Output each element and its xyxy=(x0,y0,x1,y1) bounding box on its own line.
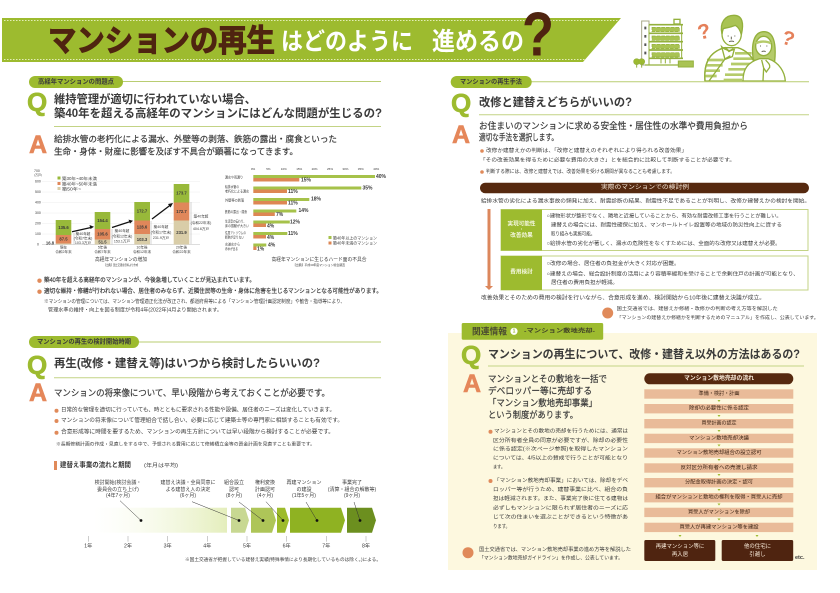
bullet notes: については、4/5以上の賛成で行うことが可能となり xyxy=(493,453,628,461)
question text xyxy=(54,92,382,120)
bullet notes: ります。 xyxy=(493,523,510,530)
answer text: デベロッパー等に売却する xyxy=(488,385,592,396)
title: white subheading: はどのように xyxy=(281,28,413,56)
bullet notes: 担は軽減されます。また、事業完了後に住てる建物は xyxy=(493,494,629,502)
bracket labels: 築40年超 xyxy=(76,231,91,236)
flow header: マンション敷地売却の流れ xyxy=(684,374,754,382)
bracket labels: (令和7年末) xyxy=(74,236,92,240)
category labels: 水道水から xyxy=(225,242,240,246)
arrow: down xyxy=(485,209,493,290)
stage labels: の建設 xyxy=(296,486,312,493)
green and orange bars xyxy=(253,175,375,250)
question text: 再生(改修・建替え等)はいつから検討したらいいの? xyxy=(54,356,320,370)
stage labels: 組合設立 xyxy=(224,479,244,486)
axis labels: 令和2年末 xyxy=(55,249,72,254)
box: feasibility xyxy=(501,210,808,250)
category labels: 鉄筋の露出・腐食 xyxy=(225,209,247,214)
flow header xyxy=(644,373,793,384)
timeline heading: 建替え事業の流れと期間 xyxy=(60,460,131,469)
flow arrows xyxy=(678,400,758,537)
flow steps: 買受人がマンションを除却 xyxy=(688,507,750,515)
axis labels: 令和22年末 xyxy=(172,249,191,254)
question text: 築40年を超える高経年のマンションにはどんな問題が生じるの? xyxy=(54,106,382,120)
bar values: 51.5 xyxy=(98,240,107,244)
bullet notes xyxy=(480,146,735,175)
value labels: 1% xyxy=(257,246,265,252)
bar chart: hardware defects: 25% xyxy=(327,167,333,171)
bar chart: hardware defects: 20% xyxy=(312,167,318,171)
box: cost: 居住者の費用負担が軽減。 xyxy=(551,278,618,286)
outcome: re-entry xyxy=(644,540,715,561)
tab: related info: 1 xyxy=(513,328,516,334)
section label: 高経年マンションの問題点 xyxy=(38,76,114,86)
stage labels: 委員会の立ち上げ) xyxy=(97,486,139,493)
value labels xyxy=(257,174,387,252)
box: feasibility: 改善効果 xyxy=(510,231,533,239)
bracket labels: 103.3万戸 xyxy=(75,240,91,245)
woman xyxy=(743,32,785,81)
box: feasibility: ・ xyxy=(519,227,524,233)
bar values: 16.8 xyxy=(46,240,55,246)
flow steps xyxy=(644,389,793,532)
timeline source note: ※国土交通省が把握している建替え実績(特殊事情により長期化しているものは除く。)による。 xyxy=(185,556,381,563)
stacked bar chart: aging condominium growth: 200 xyxy=(35,222,41,226)
value labels: 11% xyxy=(288,200,298,206)
flow steps: マンション敷地売却決議 xyxy=(689,433,750,441)
icon: A: A xyxy=(452,121,470,149)
bullet notes: 判断する際には、改修と建替えでは、改善効果を受ける期間が異なることも考慮します。 xyxy=(486,167,675,175)
bullet notes: じて次の住まいを選ぶことができるという特徴があ xyxy=(493,513,628,521)
stacked bar chart: aging condominium growth: 600 xyxy=(35,180,41,184)
icon: Q: Q xyxy=(27,350,47,380)
header bar: actual example xyxy=(480,183,809,193)
answer text: 適切な手法を選択します。 xyxy=(479,132,558,142)
bracket labels: (令和12年末) xyxy=(112,234,132,238)
axis labels: 10年後 xyxy=(136,244,148,250)
bar chart: hardware defects: 10% xyxy=(281,167,287,171)
stage labels: 認可 xyxy=(229,486,239,493)
panel: when to consider regeneration xyxy=(27,336,381,563)
stage labels: (6ヶ月) xyxy=(180,493,196,499)
bar values: 135.6 xyxy=(58,225,69,230)
timeline heading: (年月は平均) xyxy=(144,462,178,469)
arrows between bars xyxy=(72,203,173,232)
icon: A: A xyxy=(29,131,47,159)
bar values: 128.6 xyxy=(137,224,148,230)
value labels: 18% xyxy=(311,196,322,202)
value labels: 14% xyxy=(298,208,309,214)
bullet notes xyxy=(37,276,382,313)
info note: 国土交通省では、マンション敷地売却事業の進め方等を解説した xyxy=(479,546,631,553)
stacked bar chart: aging condominium growth xyxy=(34,169,211,267)
title: main heading: マンションの再生 xyxy=(48,24,275,58)
bar values: 154.4 xyxy=(97,218,108,223)
bullet notes: ※マンションの管理については、マンション管理適正化法が改正され、都道府県等による「マンション管理計画認定制度」や勧告・指導等により、 xyxy=(44,298,345,305)
bar values: 172.7 xyxy=(137,208,148,214)
answer text: 給排水管の老朽化による漏水、外壁等の剥落、鉄筋の露出・腐食といった xyxy=(54,134,337,144)
info note xyxy=(462,546,631,561)
etc label: etc. xyxy=(795,555,805,561)
category labels: 外壁等の剥落 xyxy=(225,198,244,202)
stage labels: 事業完了 xyxy=(342,479,362,486)
section label: マンションの再生手法 xyxy=(460,76,522,86)
timeline: reconstruction project flow xyxy=(54,460,381,563)
outcome: move: 他の住宅に xyxy=(744,542,771,550)
stage labels: (1年5ヶ月) xyxy=(292,492,316,499)
bar chart: hardware defects: 35% xyxy=(358,167,364,171)
stage labels: 建替え決議・全員同意に xyxy=(160,479,216,486)
stacked bar chart: aging condominium growth: 300 xyxy=(35,211,41,215)
bullet notes: に係る認定(※次ページ参照)を取得したマンション xyxy=(493,444,628,452)
info note: 「マンションの建替えか修繕かを判断するためのマニュアル」を作成し、公表しています。 xyxy=(617,314,819,321)
box: cost xyxy=(501,256,808,290)
bar chart: hardware defects: 0% xyxy=(251,167,255,171)
section label xyxy=(29,76,381,88)
category labels: 漏水や雨漏り xyxy=(225,174,243,180)
stacked bar chart: aging condominium growth: 【出典】国土交通省資料より作成 xyxy=(104,262,138,267)
year axis: 4年 xyxy=(203,542,211,550)
axis labels: 5年後 xyxy=(98,244,107,250)
bracket labels: 404.6万戸 xyxy=(193,226,209,231)
stage labels xyxy=(95,479,376,499)
illustration: apartment building and worried couple xyxy=(634,15,785,81)
icon: question mark right: ? xyxy=(779,27,797,51)
stage labels: (4年7ヶ月) xyxy=(106,492,130,499)
man xyxy=(705,15,754,81)
value labels: 12% xyxy=(290,220,301,226)
bullet notes: ロッパー等が行うため、建替事業に比べ、組合の負 xyxy=(493,485,628,493)
bullet notes: 適切な維持・修繕が行われない場合、居住者のみならず、近隣住民等の生命・身体に危害を生じるマンションとなる可能性があります。 xyxy=(44,287,382,295)
chart caption: 高経年マンションの増加 xyxy=(95,256,147,263)
legend: 築40年以上のマンション xyxy=(333,234,377,242)
stacked bar chart: aging condominium growth: 400 xyxy=(35,200,41,204)
bracket labels: (令和17年末) xyxy=(151,230,171,234)
box: cost: 費用検討 xyxy=(510,268,533,276)
value labels: 7% xyxy=(276,212,284,218)
stage labels: よる建替え人の決定 xyxy=(166,486,210,493)
leader lines xyxy=(120,501,361,522)
legend xyxy=(328,234,377,246)
category labels: 老朽化による漏水 xyxy=(225,188,249,194)
answer text: マンションの将来像について、早い段階から考えておくことが必要です。 xyxy=(54,387,330,398)
bracket labels: (令和22年末) xyxy=(191,220,211,225)
bullet notes: マンションの将来像について管理組合で話し合い、必要に応じて建築士等の専門家に相談することも有効です。 xyxy=(61,416,343,424)
bullet notes: 「マンション敷地売却事業」においては、除却をデベ xyxy=(494,476,628,484)
bullet notes: 「その改善効果を得るために必要な費用の大きさ」とを総合的に比較して判断することが必要です。 xyxy=(480,156,735,164)
answer text xyxy=(479,120,748,142)
box: feasibility: 実現可能性 xyxy=(508,220,536,228)
bar values: 173.7 xyxy=(176,190,187,196)
panel: aging condominium problems xyxy=(27,76,387,313)
icon: A: A xyxy=(29,379,47,407)
info note xyxy=(602,305,819,321)
value labels: 4% xyxy=(267,224,275,230)
bar chart: hardware defects xyxy=(225,167,387,267)
flow steps: 買受人が再建マンション等を建設 xyxy=(680,522,759,530)
tab: related info xyxy=(462,323,603,340)
stage labels: (4ヶ月) xyxy=(257,493,273,499)
answer text: マンションとその敷地を一括で xyxy=(488,373,607,384)
stacked bar chart: aging condominium growth: 700 xyxy=(34,169,40,173)
bar values: 103.3 xyxy=(137,237,148,242)
tab: related info: -マンション敷地売却- xyxy=(524,326,595,334)
answer text xyxy=(488,373,607,420)
question text: マンションの再生について、改修・建替え以外の方法はあるの? xyxy=(488,347,800,361)
value labels: 40% xyxy=(376,174,387,180)
stacked bar chart: aging condominium growth: 0 xyxy=(37,242,39,246)
box: feasibility: ○給排水管の劣化が著しく、漏水の危険性をなくすためには、全面的な改修又は建替えが必要。 xyxy=(547,239,781,247)
flow steps: マンション敷地売却組合の設立認可 xyxy=(676,448,762,456)
axis labels: 令和12年末 xyxy=(133,249,152,254)
bullet notes: 合意形成等に時間を要するため、マンションの再生方針については早い段階から検討することが必要です。 xyxy=(61,428,334,436)
bullet notes: 管理水準の維持・向上を図る制度が令和4年(2022年)4月より開始されます。 xyxy=(48,306,222,313)
stage arrows xyxy=(93,508,376,533)
bar values: 87.5 xyxy=(59,236,68,242)
stage labels: 検討開始(検討会議・ xyxy=(95,479,141,486)
flow steps: 買受計画の認定 xyxy=(702,419,736,427)
stage labels: 権利変換 xyxy=(255,479,275,486)
bar chart: hardware defects: 5% xyxy=(266,167,271,171)
stage labels: 計画認可 xyxy=(255,486,275,493)
stacked bar chart: aging condominium growth: 500 xyxy=(35,190,41,194)
legend: 築30年~40年未満 xyxy=(62,175,97,182)
answer text: お住まいのマンションに求める安全性・居住性の水準や費用負担から xyxy=(479,120,748,131)
year axis: 5年 xyxy=(243,542,251,550)
panel: renovation or reconstruction xyxy=(451,76,819,321)
timeline heading xyxy=(54,460,178,470)
bullet notes xyxy=(54,406,343,448)
bracket labels: 築40年超 xyxy=(115,228,130,233)
stage labels: (清算・組合の解散等) xyxy=(328,486,376,493)
legend: 築40年未満のマンション xyxy=(333,240,377,246)
title: white subheading 2: 進めるの xyxy=(432,28,524,56)
bar values: 172.7 xyxy=(176,209,187,214)
bar chart: hardware defects: 30% xyxy=(342,167,349,171)
section label: マンションの再生の検討開始時期 xyxy=(37,336,131,346)
box: feasibility: 建替えの場合には、耐震性確保に加え、マンホールトイレ設置等の地域の防災性向上に資する xyxy=(551,220,782,228)
flow steps: 準備・検討・計画 xyxy=(698,389,740,397)
bracket labels: 築40年超 xyxy=(194,214,209,218)
title banner xyxy=(2,0,621,70)
title: question mark: ? xyxy=(522,0,554,70)
axis labels: 20年後 xyxy=(176,244,187,250)
box: feasibility: ○建物形状が整形でなく、隣地と近接していることから、有効な耐震改修工事を行うことが難しい。 xyxy=(547,212,782,220)
bullet notes: 区分所有者全員の同意が必要ですが、除却の必要性 xyxy=(493,436,629,444)
value labels: 11% xyxy=(288,189,298,195)
panel: related information, land sale xyxy=(448,323,817,570)
building xyxy=(634,19,693,68)
example intro: 給排水管の劣化による漏水事故の頻発に加え、耐震診断の結果、耐震性不足であることが判明し、改修か建替えかの検討を開始。 xyxy=(481,197,810,205)
bracket labels: 築40年超 xyxy=(154,224,169,229)
outcome: re-entry: 再建マンション等に xyxy=(656,542,704,550)
box: cost: ○建替えの場合、総合設計制度の活用により容積率緩和を受けることで余剰住戸の計画が可能となり、 xyxy=(547,269,799,277)
bullet notes xyxy=(488,427,629,530)
category labels: 生活音の伝わり、 xyxy=(225,218,246,224)
value labels: 11% xyxy=(288,231,298,237)
bar values: 231.9 xyxy=(176,230,187,235)
year axis: 2年 xyxy=(124,542,132,550)
category labels: 床の振動が大きい xyxy=(225,223,249,228)
bullet notes: 必ずしもマンションに限られず居住者のニーズに応 xyxy=(493,504,629,512)
flow steps: 組合がマンションと敷地の権利を取得・買受人に売却 xyxy=(656,493,782,501)
bullet notes: 築40年を超える高経年のマンションが、今後急増していくことが見込まれています。 xyxy=(44,276,255,284)
axis labels xyxy=(55,244,191,254)
stacked bar chart: aging condominium growth: (万戸) xyxy=(34,173,42,177)
category labels: 給排水管の xyxy=(225,184,239,189)
bar chart: hardware defects: 15% xyxy=(296,167,303,171)
axis labels: 令和7年末 xyxy=(94,249,111,254)
section label xyxy=(29,336,381,348)
year axis: 3年 xyxy=(164,542,172,550)
year axis: 1年 xyxy=(84,542,92,550)
year axis xyxy=(84,536,370,550)
answer text: 「マンション敷地売却事業」 xyxy=(488,397,597,408)
year axis: 6年 xyxy=(283,542,291,550)
outcome: re-entry: 再入居 xyxy=(672,551,689,558)
box: cost: ○改修の場合、居住者の負担金が大きく対応が困難。 xyxy=(547,259,680,267)
legend xyxy=(58,175,97,192)
bracket labels: 231.9万戸 xyxy=(153,235,169,240)
icon: Q: Q xyxy=(27,87,47,117)
question text: 維持管理が適切に行われていない場合、 xyxy=(54,92,256,106)
flow: land sale steps xyxy=(644,373,805,561)
category labels: 断熱が足りない xyxy=(225,234,244,240)
year axis: 7年 xyxy=(322,542,330,550)
axis labels: 現在 xyxy=(60,244,67,250)
bullet notes: 改修か建替えかの判断は、「改修と建替えのそれぞれにより得られる改善効果」 xyxy=(486,146,687,154)
legend: 築40年~50年未満 xyxy=(62,180,97,188)
bar values xyxy=(46,190,187,246)
category labels: 赤水が出る xyxy=(225,246,238,251)
bracket labels xyxy=(74,202,211,245)
stage labels: 再建マンション xyxy=(286,479,322,486)
outcome: move: 引越し xyxy=(749,550,766,558)
section label xyxy=(451,76,809,88)
legend: 築50年~ xyxy=(62,186,82,192)
info note: 「マンション敷地売却ガイドライン」を作成し、公表しています。 xyxy=(479,554,623,561)
bar chart: hardware defects: 【出典】平成30年度マンション総合調査 xyxy=(293,262,345,267)
flow steps: 反対区分所有者への売渡し請求 xyxy=(680,463,758,471)
stage labels: (8ヶ月) xyxy=(226,493,242,499)
chart caption: 高経年マンションに生じるハード面の不具合 xyxy=(272,256,366,263)
answer text xyxy=(54,134,337,156)
year axis: 8年 xyxy=(362,542,370,550)
bar values: 105.6 xyxy=(97,232,108,236)
outcome: move xyxy=(722,540,793,561)
bullet notes: ます。 xyxy=(493,464,505,470)
category labels: 住居アトリウムの xyxy=(225,230,246,235)
box: feasibility: 取り組みも実施可能。 xyxy=(551,229,595,237)
bar chart: hardware defects: 40% xyxy=(373,167,380,171)
bullet notes: ※長期修繕計画の作成・見直しをする中で、予想される費用に応じて修繕積立金等の資金計画を見直すことも重要です。 xyxy=(56,440,315,448)
info note: 国土交通省では、建替えか修繕・改修かの判断の考え方等を解説した xyxy=(617,305,778,312)
icon: Q: Q xyxy=(451,88,471,118)
value labels: 15% xyxy=(301,178,312,184)
bullet notes: 日常的な管理を適切に行っていても、時とともに要求される性能や設備、居住者のニーズは変化していきます。 xyxy=(61,406,335,414)
flow steps: 分配金取得計画の決定・認可 xyxy=(685,478,753,486)
question text: 改修と建替えどちらがいいの? xyxy=(479,95,632,109)
answer text: という制度があります。 xyxy=(488,409,578,420)
bracket labels: 153.1万戸 xyxy=(114,238,130,244)
bullet notes: マンションとその敷地の売却を行うためには、通常は xyxy=(494,427,629,435)
icon: A: A xyxy=(463,370,481,398)
example conclusion: 改善効果とそのための費用の検討を行いながら、合意形成を進め、検討開始から10年後に建替え決議が成立。 xyxy=(481,293,765,301)
icon: Q: Q xyxy=(461,340,481,370)
stage labels: (9ヶ月) xyxy=(344,493,360,499)
icon: question mark left: ? xyxy=(695,19,713,45)
tab: related info: 関連情報 xyxy=(472,325,507,336)
value labels: 4% xyxy=(267,235,275,241)
stacked bar chart: aging condominium growth: 100 xyxy=(35,232,41,236)
header bar: actual example: 実際のマンションでの検討例 xyxy=(601,183,689,191)
value labels: 4% xyxy=(268,242,276,248)
bars xyxy=(56,184,189,244)
flow steps: 除却の必要性に係る認定 xyxy=(689,404,749,412)
category labels xyxy=(225,174,249,251)
answer text: 生命・身体・財産に影響を及ぼす不具合が顕著になってきます。 xyxy=(54,146,298,156)
value labels: 35% xyxy=(362,186,373,192)
